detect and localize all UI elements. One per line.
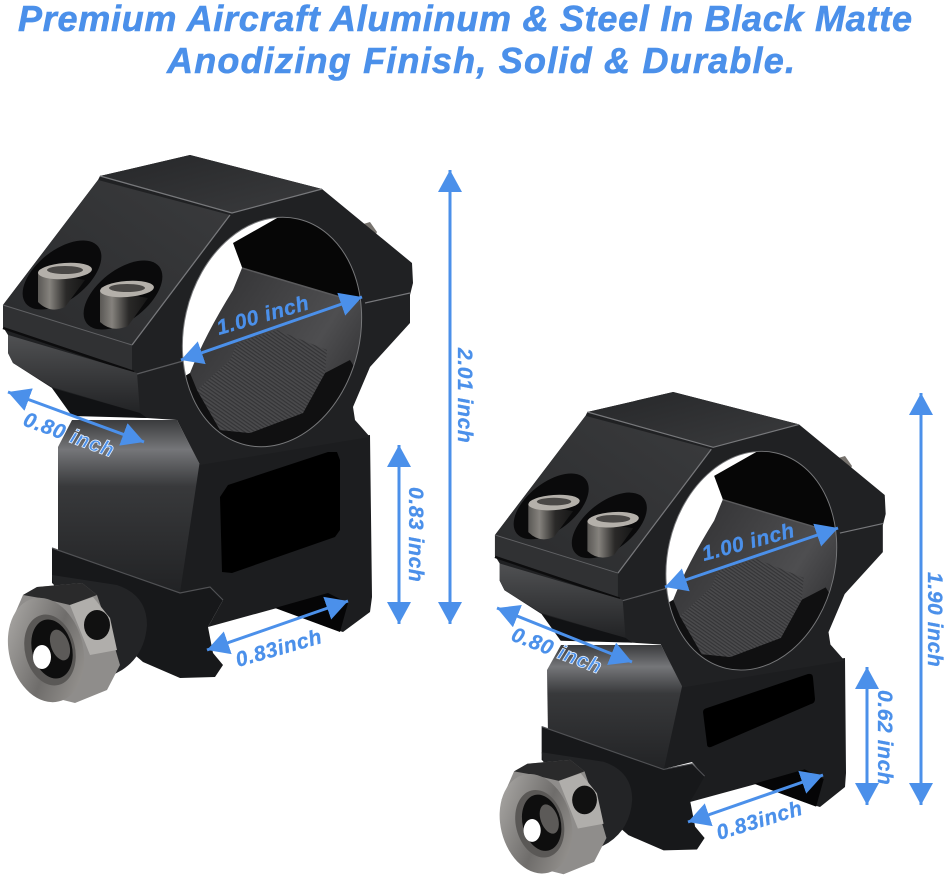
label: 0.80 inch: 0.80 inch: [20, 408, 118, 462]
title: [18, 0, 912, 81]
left mount rear bolt tip: [360, 222, 377, 242]
right mount window: [703, 674, 815, 747]
dimensions: left mount: [8, 170, 476, 672]
label: 0.83 inch height: 0.83 inch: [404, 487, 427, 582]
right mount body block: [547, 645, 846, 807]
hole: [182, 216, 362, 448]
arrow: 0.83 inch width: [688, 775, 823, 822]
arrow: 2.01 inch: [448, 170, 452, 624]
right mount: [490, 392, 886, 877]
label: 2.01 inch: 2.01 inch: [453, 347, 476, 443]
left mount: [0, 155, 413, 710]
dimensions: right mount: [497, 393, 946, 845]
screws: [10, 227, 175, 343]
arrow: 0.83 inch height: [398, 445, 400, 624]
left mount nut: [0, 575, 147, 710]
label: 1.00 inch: 1.00 inch: [699, 519, 797, 566]
arrow: 0.80 inch: [8, 392, 144, 442]
right mount ring: [495, 392, 886, 692]
title: Anodizing Finish, Solid & Durable.: [166, 40, 795, 81]
arrow: 0.80 inch: [497, 608, 632, 662]
left mount ring: [3, 155, 413, 470]
label: 0.62 inch: 0.62 inch: [873, 690, 896, 785]
right mount nut: [490, 752, 632, 877]
left mount rail clamp: [52, 548, 348, 678]
left mount window: [220, 452, 340, 573]
right mount rear bolt tip: [835, 456, 852, 476]
label: 0.83inch width: 0.83inch: [714, 797, 805, 845]
left mount body block: [58, 420, 372, 632]
right mount rail clamp: [542, 727, 824, 850]
label: 1.00 inch: 1.00 inch: [214, 291, 312, 340]
arrow: 1.00 inch: [665, 528, 838, 587]
label: 0.83inch width: 0.83inch: [233, 625, 325, 672]
screws: [502, 461, 659, 571]
arrow: 0.83 inch width: [207, 601, 348, 650]
label: 0.80 inch: 0.80 inch: [508, 623, 605, 679]
arrow: 1.90 inch: [920, 393, 922, 805]
label: 1.90 inch: 1.90 inch: [923, 572, 946, 667]
arrow: 0.62 inch: [866, 667, 868, 805]
hole: [665, 450, 838, 670]
arrow: 1.00 inch: [181, 297, 362, 360]
